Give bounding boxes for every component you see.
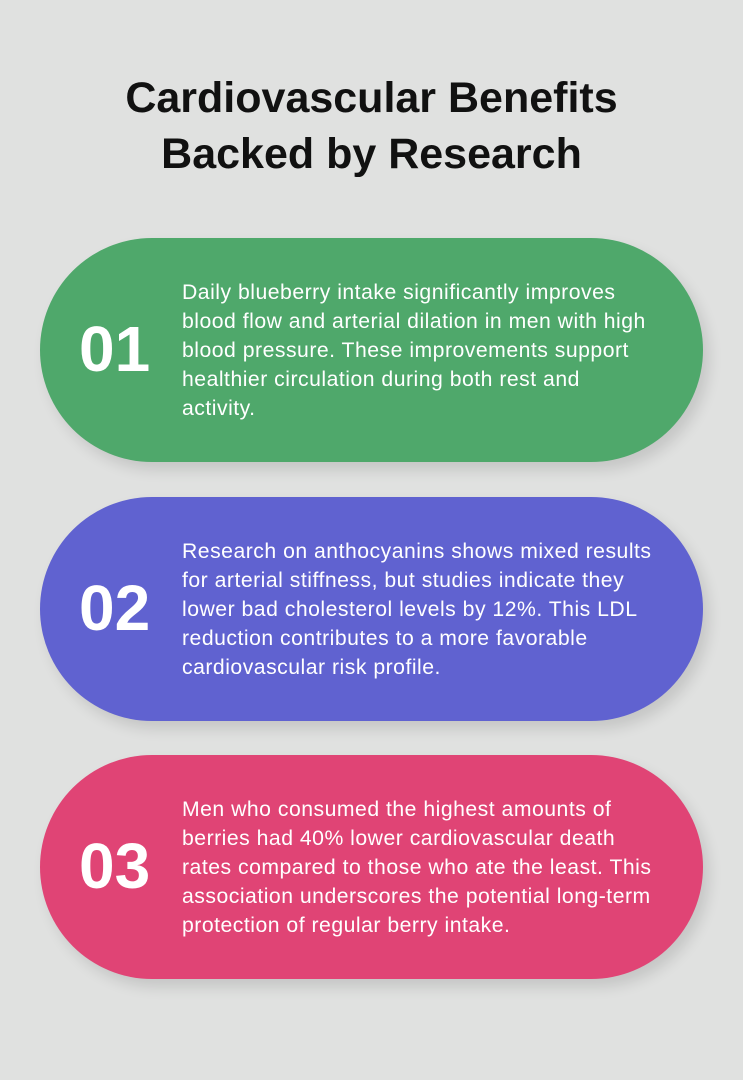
panel: 02 <box>40 497 703 721</box>
number 02: 02 <box>79 572 150 644</box>
text 03: berries had 40% lower cardiovascular death <box>182 827 615 850</box>
text 03: rates compared to those who ate the least. This <box>182 856 651 879</box>
text 01: activity. <box>182 397 256 420</box>
panel: 01 <box>40 238 703 462</box>
title: Backed by Research <box>161 130 582 178</box>
text 02: for arterial stiffness, but studies indicate they <box>182 569 624 592</box>
panel: 03 <box>40 755 703 979</box>
text 01: blood pressure. These improvements support <box>182 339 629 362</box>
text 02: reduction contributes to a more favorable <box>182 627 588 650</box>
text 02: lower bad cholesterol levels by 12%. This LDL <box>182 598 638 621</box>
text 03 <box>182 798 651 937</box>
text 03: Men who consumed the highest amounts of <box>182 798 611 821</box>
text 03: protection of regular berry intake. <box>182 914 510 937</box>
number 01: 01 <box>79 313 150 385</box>
text 01 <box>182 281 646 420</box>
text 01: blood flow and arterial dilation in men with high <box>182 310 646 333</box>
text 02: cardiovascular risk profile. <box>182 656 441 679</box>
title: Cardiovascular Benefits <box>125 74 618 122</box>
number 03: 03 <box>79 830 150 902</box>
text 01: Daily blueberry intake significantly improves <box>182 281 615 304</box>
text 02: Research on anthocyanins shows mixed results <box>182 540 652 563</box>
text 02 <box>182 540 652 679</box>
title <box>125 74 618 178</box>
text 01: healthier circulation during both rest and <box>182 368 580 391</box>
text 03: association underscores the potential long-term <box>182 885 651 908</box>
